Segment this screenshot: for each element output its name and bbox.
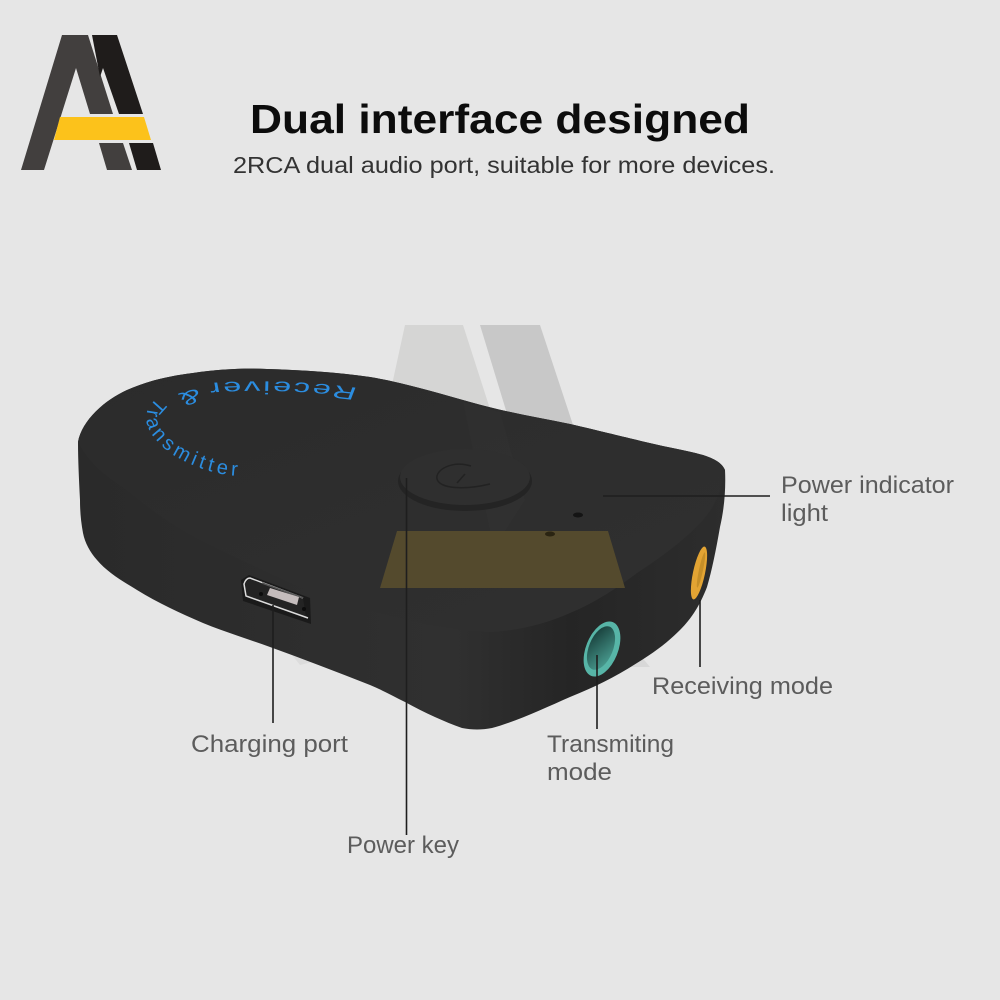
- yellow band overlay: [380, 531, 625, 588]
- micro USB port: [241, 575, 311, 624]
- icon: power symbol: [437, 464, 490, 488]
- orange receive jack: [688, 545, 710, 601]
- logo: [21, 35, 161, 170]
- label: charging port: Charging port: [191, 731, 348, 758]
- label: transmitting mode: Transmiting: [547, 731, 674, 758]
- teal transmit jack: [576, 616, 628, 682]
- watermark showing through device: [463, 402, 525, 531]
- power button: [398, 449, 532, 511]
- curved brand text: Transmitter: [146, 401, 238, 476]
- label: transmitting mode: [547, 731, 674, 786]
- label: power indicator light: Power indicator: [781, 472, 954, 499]
- device: [78, 368, 726, 730]
- subtitle: 2RCA dual audio port, suitable for more devices.: [233, 152, 775, 178]
- curved brand text: Receiver: [210, 381, 356, 400]
- device body: [78, 369, 725, 730]
- label: power key: Power key: [347, 832, 459, 859]
- label: transmitting mode: mode: [547, 759, 612, 786]
- label: receiving mode: Receiving mode: [652, 673, 833, 700]
- indicator holes: [545, 512, 583, 536]
- title: Dual interface designed: [250, 96, 750, 142]
- device top face: [78, 369, 725, 632]
- label: power indicator light: light: [781, 500, 828, 527]
- watermark logo: [292, 325, 650, 667]
- curved brand text: &: [176, 384, 203, 411]
- curved brand text: [146, 381, 356, 476]
- callout lines: [273, 478, 770, 835]
- label: power indicator light: [781, 472, 954, 527]
